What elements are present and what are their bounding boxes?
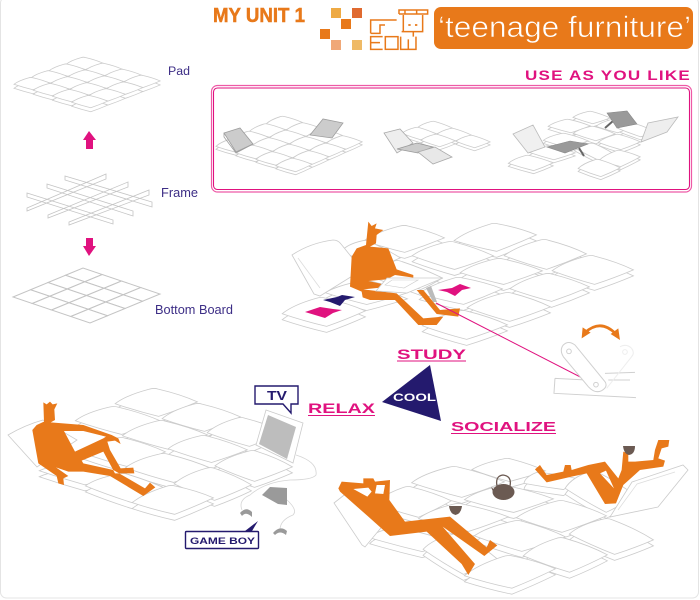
exploded view: bottom board layer	[13, 268, 160, 323]
tea cup right	[623, 446, 635, 455]
game console	[262, 487, 287, 505]
cool triangle	[382, 365, 441, 421]
left figure	[338, 478, 497, 575]
exploded view: frame layer	[27, 174, 152, 225]
heading: use as you like: USE AS YOU LIKE	[525, 67, 691, 83]
tv screen	[256, 410, 303, 463]
label: relax	[308, 400, 376, 416]
label: study: STUDY	[397, 346, 467, 362]
label: socialize	[451, 419, 556, 434]
arrow: up	[83, 131, 96, 149]
label: bottom board: Bottom Board	[155, 303, 233, 317]
game boy speech bubble	[186, 521, 258, 548]
game boy speech bubble: GAME BOY	[190, 536, 256, 547]
scene: socialize	[334, 440, 688, 595]
arrow: rotation	[582, 326, 620, 340]
hinge detail	[554, 342, 636, 398]
arrow: down	[83, 238, 96, 256]
label: frame: Frame	[161, 186, 198, 200]
cables	[241, 455, 316, 530]
relax cushions	[8, 387, 295, 521]
logo: cow line art	[371, 10, 428, 49]
tv speech bubble	[255, 386, 298, 413]
configuration 2: folded seat	[384, 120, 491, 164]
title: my unit 1: MY UNIT 1	[213, 5, 305, 27]
label: relax: RELAX	[308, 400, 376, 416]
configuration 3: tables and loose pads	[506, 110, 678, 180]
label: pad: Pad	[168, 66, 190, 78]
label: study	[397, 346, 467, 362]
panel: use as you like	[212, 86, 692, 192]
books	[305, 284, 471, 318]
logo: coloured squares	[320, 8, 362, 50]
right figure	[535, 440, 669, 504]
pointer line	[436, 303, 592, 384]
study figure	[350, 222, 460, 325]
configuration 1: two raised backrests	[214, 115, 363, 175]
scene: study	[278, 222, 636, 346]
study table	[376, 278, 443, 302]
cool triangle: COOL	[393, 392, 436, 404]
relax figure	[32, 402, 155, 496]
controllers	[240, 509, 287, 535]
tv speech bubble: TV	[267, 389, 288, 403]
socialize cushions	[334, 457, 688, 595]
label: socialize: SOCIALIZE	[451, 419, 556, 434]
study cushions	[278, 222, 636, 346]
title banner: ‘teenage furniture’	[438, 11, 691, 44]
exploded view: pad layer	[12, 56, 161, 112]
scene: relax	[8, 386, 316, 548]
teapot	[491, 475, 514, 500]
tea cup left	[449, 506, 462, 515]
